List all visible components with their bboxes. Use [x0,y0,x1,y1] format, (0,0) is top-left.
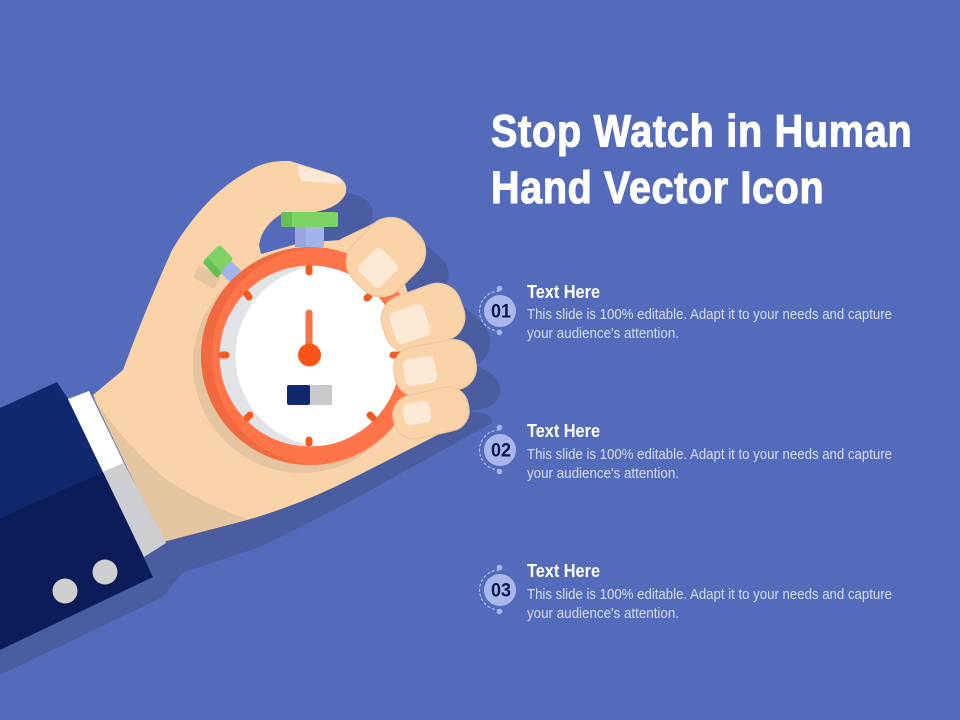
badge 01: 01 [491,302,511,322]
body 01: This slide is 100% editable. Adapt it to your needs and capture [527,306,892,323]
wrist shading [93,397,247,542]
badge 02: 02 [491,440,511,462]
heading 02: Text Here [527,421,600,441]
body 03: your audience's attention. [527,605,679,622]
body 02 [527,446,892,482]
cuff [68,391,124,472]
body 03: This slide is 100% editable. Adapt it to your needs and capture [527,586,892,603]
finger 4 [389,383,473,443]
illustration: hand holding stopwatch [0,161,500,675]
title [491,106,912,213]
badge 02 [480,425,516,474]
sleeve [0,382,166,650]
toggle [287,385,310,405]
body 03 [527,586,892,622]
badge 01 [480,286,516,335]
title: Hand Vector Icon [491,163,824,213]
badge 03 [480,565,516,614]
top crown [281,212,338,247]
finger 3 [390,336,480,400]
item 03 [480,561,892,622]
side crown [193,244,244,289]
infographic canvas [0,113,910,675]
buttons [92,560,118,584]
stopwatch [193,247,430,473]
hand cast shadow [0,190,500,675]
finger 1 [336,207,436,307]
ticks [222,268,399,443]
fingers [336,207,480,443]
body 02: This slide is 100% editable. Adapt it to your needs and capture [527,446,892,463]
title: Stop Watch in Human [491,106,912,156]
hand and thumb [93,161,463,542]
body 01: your audience's attention. [527,325,679,342]
item 01 [480,282,892,342]
heading 01: Text Here [527,282,600,302]
badge 03: 03 [491,580,511,602]
watch hand [306,313,312,345]
thumb nail [298,165,341,184]
finger 2 [375,277,471,359]
body 02: your audience's attention. [527,465,679,482]
item 02 [480,421,892,482]
heading 03: Text Here [527,561,600,581]
body 01 [527,306,892,342]
